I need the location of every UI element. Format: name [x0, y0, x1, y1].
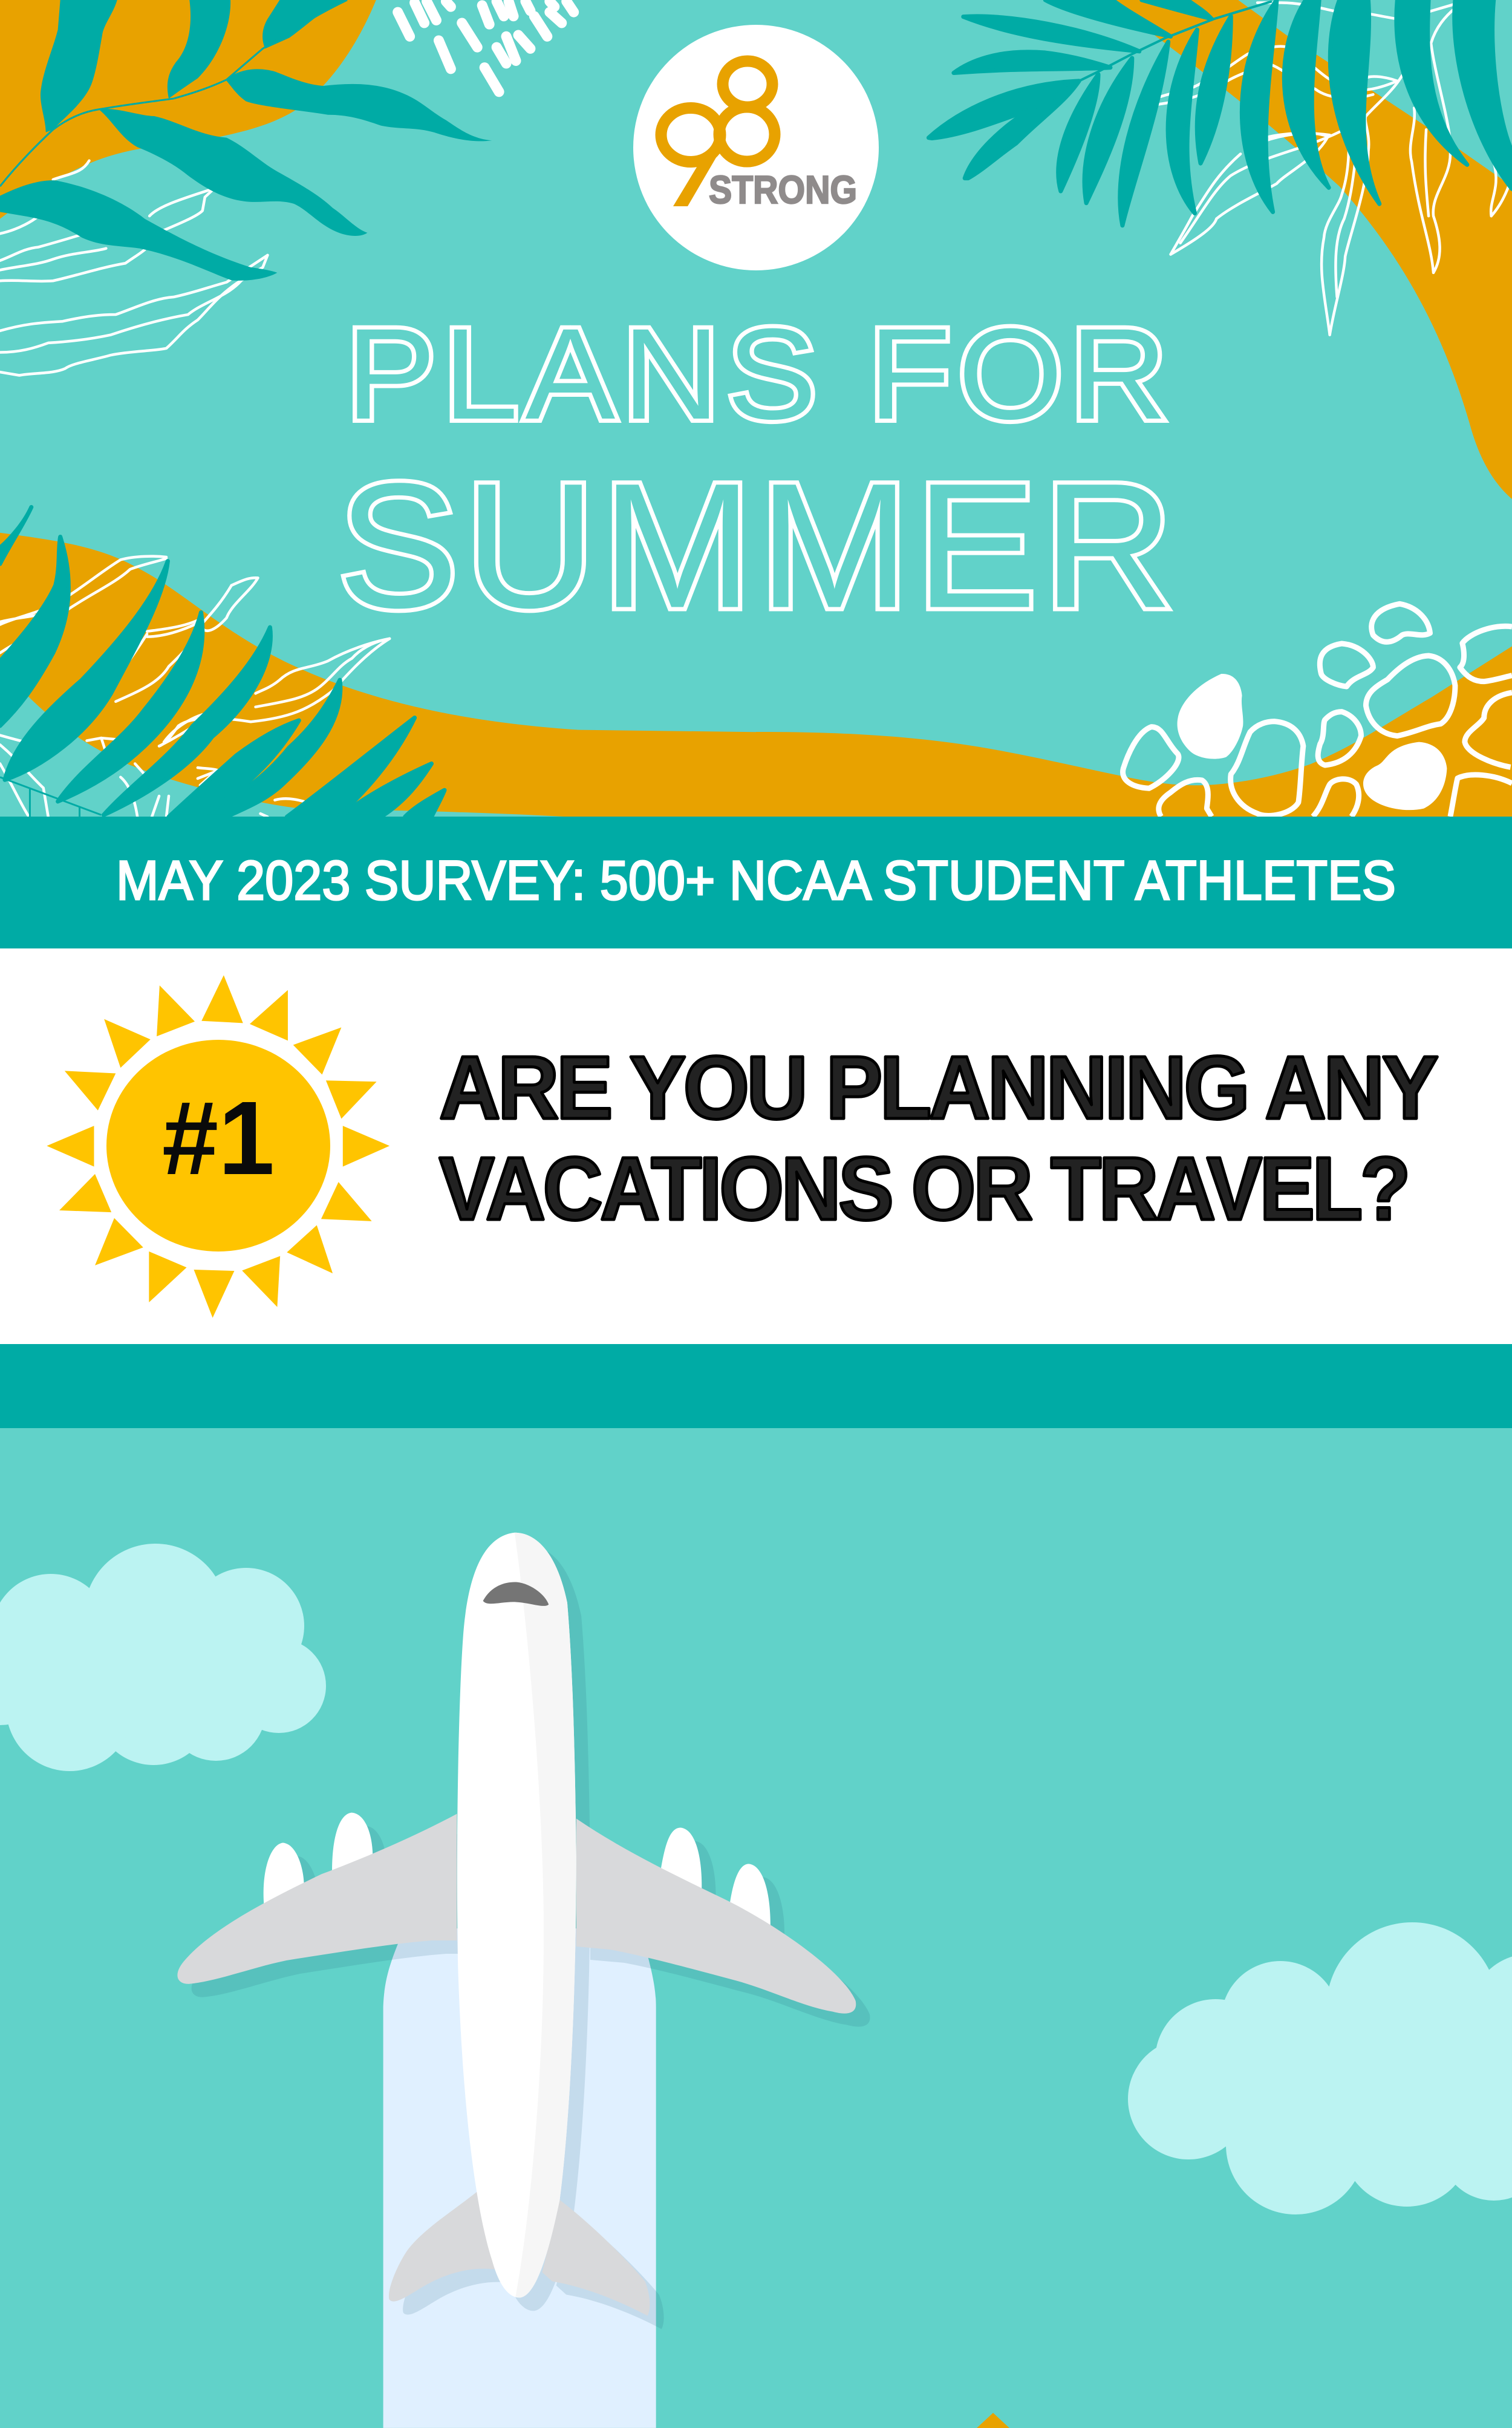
decoration: bottom-left white line leaves: [0, 556, 389, 817]
arrow tip: orange: [977, 2413, 1009, 2428]
contrail: [383, 1928, 656, 2428]
icon: sun with number 1: [47, 975, 389, 1318]
engines: [264, 1813, 771, 1931]
divider band: [0, 1344, 1512, 1428]
fuselage shading: [515, 1533, 576, 2297]
heading: question line 1: ARE YOU PLANNING ANY: [439, 1038, 1438, 1138]
panel: header: [0, 0, 1512, 817]
banner: survey subtitle: MAY 2023 SURVEY: 500+ NCAA STUDENT ATHLETES: [116, 850, 1396, 912]
title: plans for: PLANS FOR: [346, 302, 1175, 446]
cloud: left: [0, 1544, 326, 1771]
logo: 98 Strong: [633, 25, 879, 270]
cloud: right: [1128, 1922, 1512, 2214]
decoration: top-right palm frond: [928, 0, 1512, 226]
decoration: bottom-left palm frond: [0, 507, 445, 817]
airplane shadow: [192, 1546, 870, 2329]
panel: question 1: [0, 948, 1512, 1344]
decoration: top-right orange band: [1113, 0, 1512, 499]
title: summer: SUMMER: [337, 446, 1179, 645]
decoration: top-right white line leaves: [1152, 2, 1512, 335]
decoration: white pebbles: [1123, 604, 1512, 817]
panel: sky scene: [0, 1533, 1512, 2428]
decoration: top-left teal branch: [0, 0, 492, 281]
decoration: top-left orange blob: [0, 0, 376, 219]
banner: survey subtitle: [0, 817, 1512, 948]
fuselage: [457, 1533, 576, 2297]
icon: sun with number 1: #1: [162, 1079, 275, 1196]
heading: question line 2: VACATIONS OR TRAVEL?: [439, 1139, 1408, 1239]
decoration: white brush marks: [398, 1, 574, 92]
decoration: bottom-right orange wave: [756, 646, 1512, 817]
cockpit window: [483, 1582, 549, 1606]
decoration: top-left white line leaves: [0, 161, 267, 375]
wings and tail: [177, 1814, 856, 2315]
logo: 98 Strong: STRONG: [709, 168, 857, 212]
icon: airplane: [177, 1533, 870, 2329]
decoration: bottom-left orange wave: [0, 533, 756, 817]
